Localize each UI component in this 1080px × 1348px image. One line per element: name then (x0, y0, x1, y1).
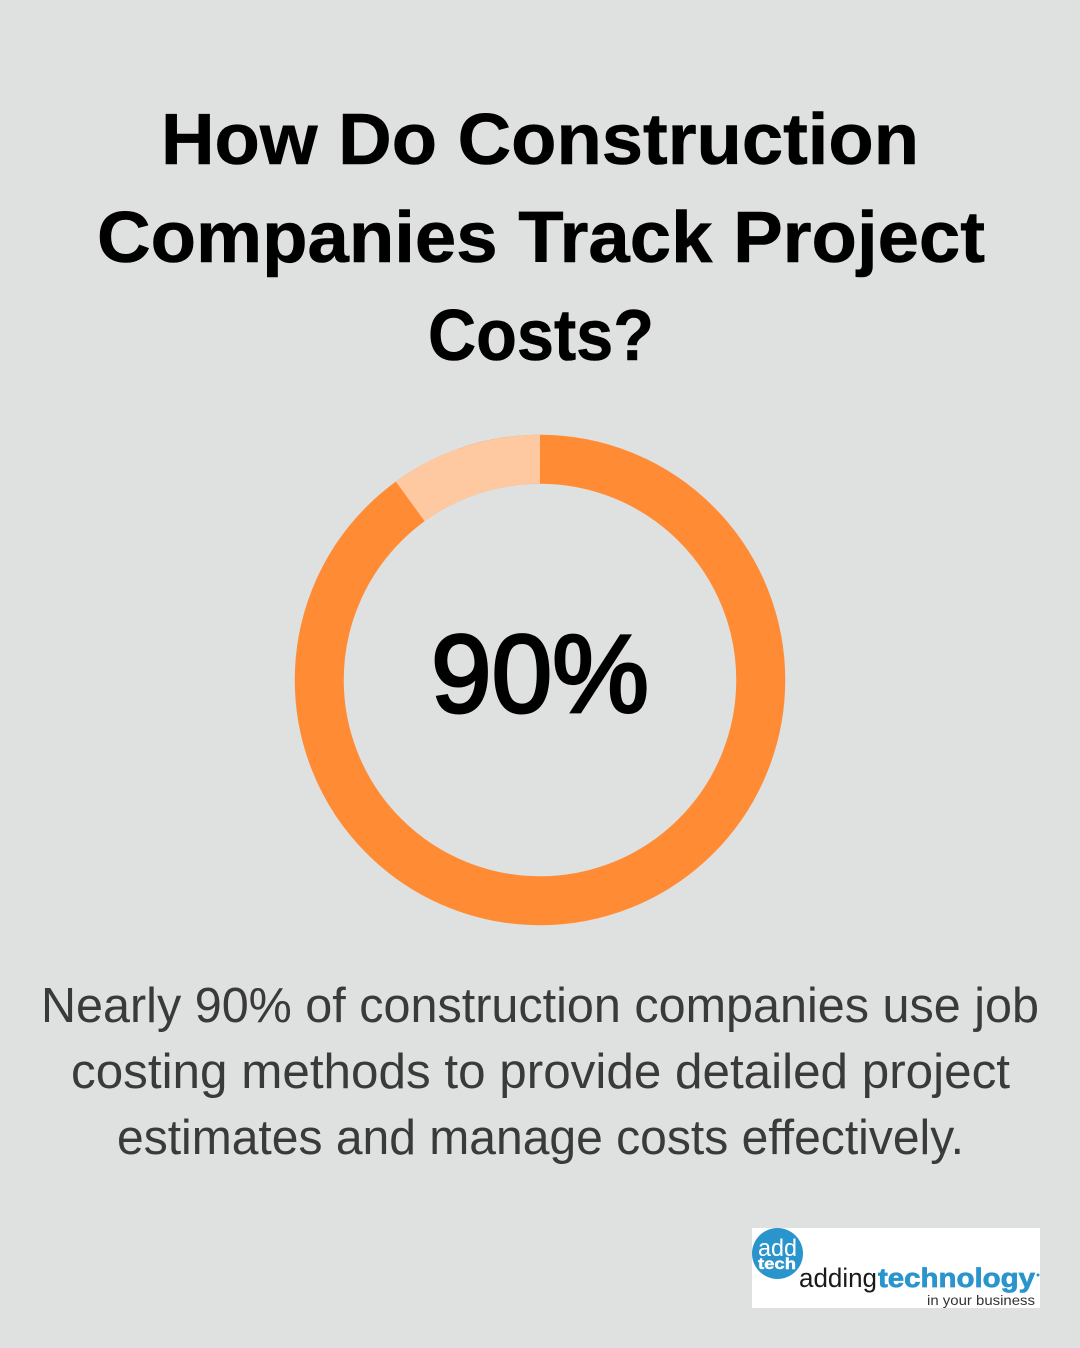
logo: adding technology (752, 1228, 1040, 1308)
logo badge: add (758, 1235, 797, 1262)
logo badge: tech (758, 1256, 796, 1273)
title: Costs? (428, 296, 654, 376)
title: How Do Construction (161, 100, 919, 180)
description text: costing methods to provide detailed project (71, 1045, 1010, 1099)
logo wordmark: adding (799, 1263, 877, 1293)
title: Companies Track Project (97, 198, 985, 278)
description text: estimates and manage costs effectively. (117, 1111, 964, 1165)
title (97, 100, 985, 376)
logo badge (752, 1228, 803, 1279)
logo wordmark (799, 1263, 1035, 1293)
donut chart: 90% (319, 459, 761, 901)
logo tagline: in your business (927, 1292, 1035, 1308)
logo registered mark (1036, 1274, 1040, 1276)
logo wordmark: technology (878, 1263, 1035, 1293)
description text: Nearly 90% of construction companies use job (41, 979, 1039, 1033)
description text (41, 979, 1039, 1165)
donut value: 90% (431, 613, 649, 736)
